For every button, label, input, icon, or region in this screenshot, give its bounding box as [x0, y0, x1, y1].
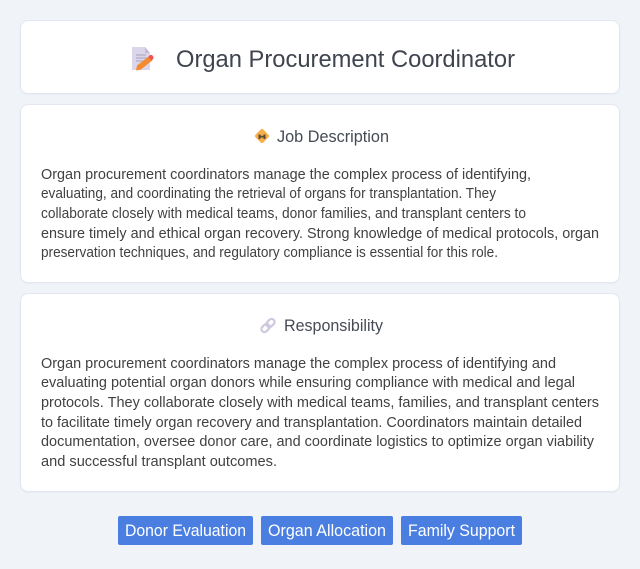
tag: organ allocation: Organ Allocation — [268, 522, 386, 540]
text block: responsibility: protocols. They collaborate closely with medical teams, families, and transplant centers — [41, 395, 599, 411]
heading: responsibility: Responsibility — [284, 317, 384, 335]
tag: family support: Family Support — [408, 522, 515, 540]
text block: job description: ensure timely and ethical organ recovery. Strong knowledge of medical protocols, organ — [41, 226, 599, 242]
text block: job description: Organ procurement coordinators manage the complex process of identifying, — [41, 167, 531, 183]
title: Organ Procurement Coordinator — [176, 46, 515, 73]
tag: organ allocation — [261, 516, 393, 545]
tag: family support — [401, 516, 522, 545]
text block: responsibility: evaluating potential organ donors while ensuring compliance with medical and legal — [41, 375, 575, 391]
tag: donor evaluation — [118, 516, 253, 545]
text block: responsibility: Organ procurement coordinators manage the complex process of identifying and — [41, 356, 556, 372]
panel: job description card — [20, 104, 620, 283]
panel: title card — [20, 20, 620, 94]
text block: responsibility — [41, 356, 599, 470]
text block: responsibility: and successful transplant outcomes. — [41, 454, 277, 470]
panel: responsibility card — [20, 293, 620, 492]
heading: job description: Job Description — [277, 128, 389, 146]
icon: diamond sign — [254, 128, 270, 144]
text block: responsibility: documentation, oversee donor care, and coordinate logistics to optimize organ viability — [41, 434, 595, 450]
text block: job description — [41, 167, 599, 261]
icon: document with pencil — [132, 47, 154, 70]
tag: donor evaluation: Donor Evaluation — [125, 522, 246, 540]
text block: job description: preservation techniques, and regulatory compliance is essential for this role. — [41, 245, 498, 261]
text block: job description: collaborate closely with medical teams, donor families, and transplant centers to — [41, 206, 526, 222]
text block: job description: evaluating, and coordinating the retrieval of organs for transplantation. They — [41, 186, 497, 202]
text block: responsibility: to facilitate timely organ recovery and transplantation. Coordinators maintain detailed — [41, 415, 582, 431]
icon: chain link — [260, 318, 276, 333]
